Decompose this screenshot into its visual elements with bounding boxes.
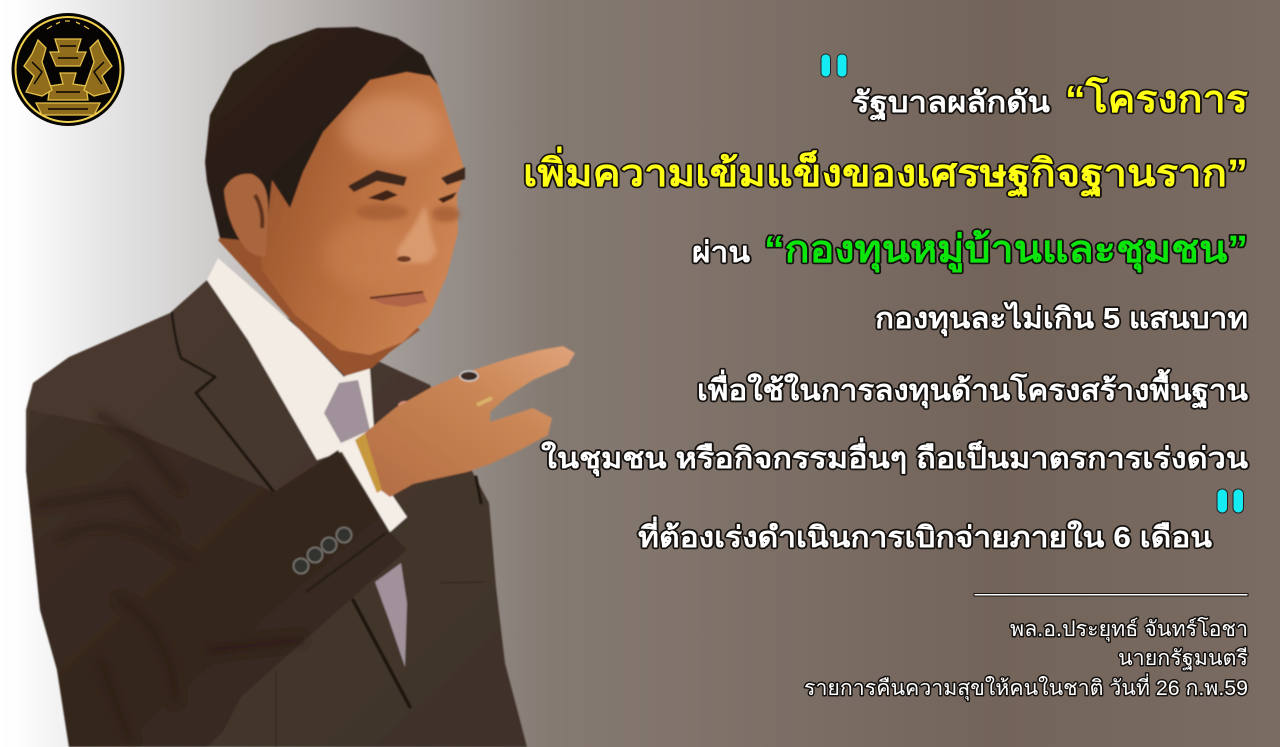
eye bags [356,204,460,222]
cheek highlight [324,220,420,290]
face [255,55,465,355]
quote text block [523,76,1249,554]
rings [460,371,492,405]
line 3: ผ่าน “กองทุนหมู่บ้านและชุมชน” [692,229,1248,273]
attribution divider [974,594,1248,596]
seal emblem [24,21,112,115]
jacket lapel lines [172,313,483,747]
speaker name: พล.อ.ประยุทธ์ จันทร์โอชา [1010,617,1248,642]
attribution text [804,617,1248,701]
eyebrows [348,167,465,192]
mouth line [370,292,423,298]
line 7: ที่ต้องเร่งดำเนินการเบิกจ่ายภายใน 6 เดือน [638,516,1212,554]
inner ear [255,195,262,228]
mouth [370,292,427,307]
shirt cuff [339,440,407,532]
gold bracelet [355,433,382,493]
ear [224,174,268,256]
necktie [324,380,407,667]
opening quotation mark [821,54,847,77]
speaker title: นายกรัฐมนตรี [1118,647,1248,670]
neck [218,190,420,376]
logo: government seal [12,13,124,126]
hair [205,27,438,240]
closing quotation mark [1217,489,1244,513]
forehead highlight [342,94,442,162]
eyes [368,190,457,203]
nose [397,205,437,263]
line 5: เพื่อใช้ในการลงทุนด้านโครงสร้างพื้นฐาน [697,368,1248,409]
jacket sleeve [26,410,407,747]
line 1: รัฐบาลผลักดัน “โครงการ [852,76,1249,121]
shirt and collar [207,258,374,460]
suit body [26,280,527,747]
cuff buttons [294,528,352,574]
line 2: เพิ่มความเข้มแข็งของเศรษฐกิจฐานราก” [523,146,1248,198]
fingertip behind hand [398,401,412,411]
nostril [397,256,411,262]
line 4: กองทุนละไม่เกิน 5 แสนบาท [875,301,1248,336]
seal details [32,46,104,109]
photo: speaker in brown suit [26,27,575,747]
line 6: ในชุมชน หรือกิจกรรมอื่นๆ ถือเป็นมาตรการเร่งด่วน [541,437,1248,476]
sleeve fold shadows [40,415,300,740]
source and date: รายการคืนความสุขให้คนในชาติ วันที่ 26 ก.พ.59 [804,673,1248,701]
raised hand [365,346,575,497]
